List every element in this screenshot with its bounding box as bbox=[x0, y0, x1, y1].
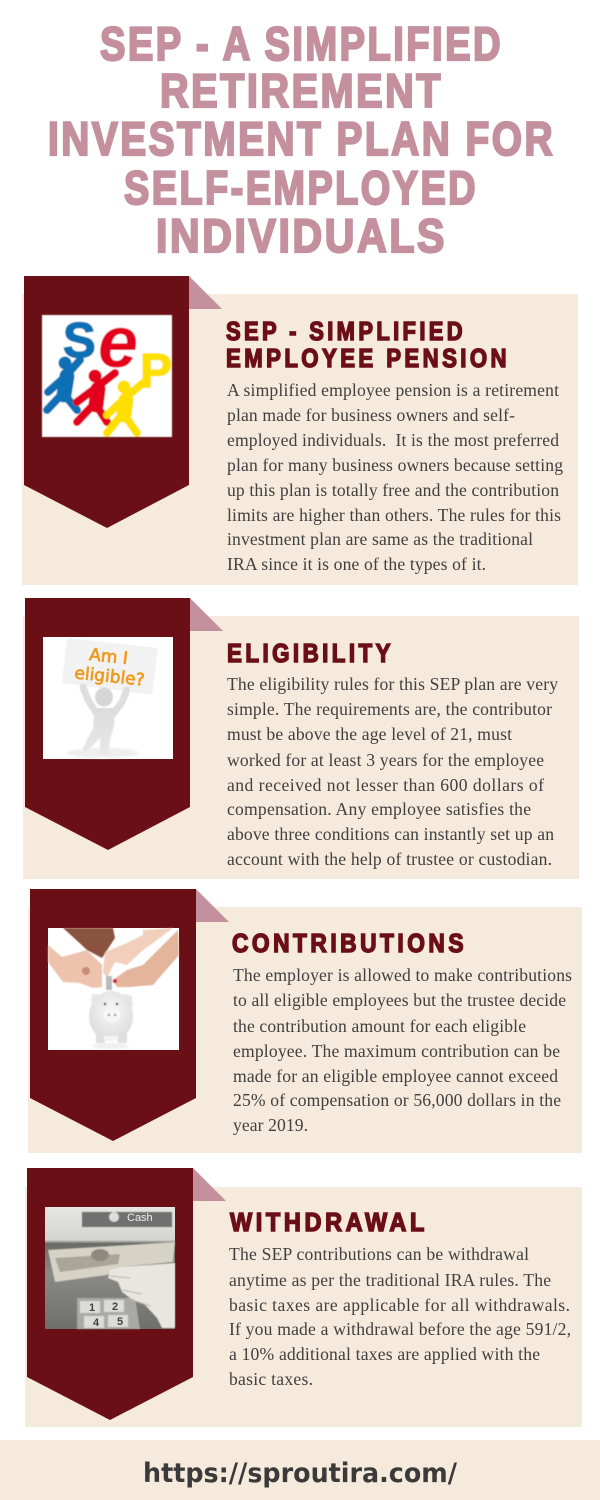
ribbon fold bbox=[193, 1168, 226, 1201]
icon: hands over piggy bank bbox=[48, 928, 179, 1050]
body text bbox=[229, 1244, 571, 1389]
panel: contributions bbox=[28, 889, 582, 1153]
ribbon fold bbox=[189, 276, 222, 309]
body text: worked for at least 3 years for the employee bbox=[227, 750, 544, 770]
keypad digit 2: 2 bbox=[112, 1301, 118, 1313]
keypad digit 1: 1 bbox=[89, 1302, 95, 1314]
body text: up this plan is totally free and the contribution bbox=[227, 480, 559, 500]
icon: am I eligible figure bbox=[43, 637, 173, 759]
icon: SEP logo: P bbox=[140, 345, 172, 398]
title: RETIREMENT bbox=[160, 64, 443, 117]
icon: ATM cash withdrawal: Cash bbox=[127, 1212, 153, 1224]
body text: basic taxes are applicable for all withdrawals. bbox=[229, 1295, 570, 1315]
body text: plan made for business owners and self- bbox=[227, 405, 515, 425]
panel: withdrawal bbox=[25, 1168, 582, 1427]
heading: EMPLOYEE PENSION bbox=[226, 343, 510, 373]
title: SELF-EMPLOYED bbox=[124, 161, 478, 214]
icon: am I eligible figure: eligible? bbox=[73, 663, 146, 691]
keypad digit 5: 5 bbox=[117, 1316, 123, 1328]
body text: to all eligible employees but the trustee decide bbox=[233, 990, 566, 1010]
body text: account with the help of trustee or custodian. bbox=[227, 849, 552, 869]
ribbon bbox=[30, 889, 196, 1141]
title: INDIVIDUALS bbox=[156, 209, 447, 262]
panel background bbox=[22, 294, 578, 585]
body text: plan for many business owners because setting bbox=[227, 455, 563, 475]
body text bbox=[227, 674, 558, 869]
body text: above three conditions can instantly set up an bbox=[227, 824, 554, 844]
body text bbox=[233, 965, 572, 1135]
panel: SEP definition bbox=[22, 276, 578, 585]
body text: basic taxes. bbox=[229, 1369, 313, 1389]
body text: compensation. Any employee satisfies the bbox=[227, 799, 531, 819]
ribbon fold bbox=[190, 598, 223, 631]
body text: The employer is allowed to make contributions bbox=[233, 965, 572, 985]
body text: employed individuals. It is the most preferred bbox=[227, 430, 559, 450]
title: SEP - A SIMPLIFIED bbox=[100, 17, 503, 70]
keypad digit 4: 4 bbox=[93, 1317, 100, 1329]
icon: SEP logo: S bbox=[63, 314, 96, 368]
panel background bbox=[23, 616, 579, 879]
panel background bbox=[28, 907, 582, 1153]
icon: am I eligible figure: Am I bbox=[88, 645, 129, 669]
body text: The SEP contributions can be withdrawal bbox=[229, 1244, 529, 1264]
ribbon fold bbox=[196, 889, 229, 922]
body text: a 10% additional taxes are applied with the bbox=[229, 1344, 540, 1364]
footer url: https://sproutira.com/ bbox=[143, 1458, 457, 1489]
heading bbox=[226, 316, 510, 373]
icon: SEP logo: e bbox=[98, 303, 138, 383]
body text: and received not lesser than 600 dollars of bbox=[227, 775, 544, 795]
ribbon bbox=[24, 276, 189, 528]
body text: 25% of compensation or 56,000 dollars in the bbox=[233, 1090, 561, 1110]
icon: SEP logo bbox=[42, 303, 172, 437]
heading: SEP - SIMPLIFIED bbox=[226, 316, 466, 346]
heading: CONTRIBUTIONS bbox=[232, 928, 467, 958]
body text: the contribution amount for each eligible bbox=[233, 1016, 526, 1036]
body text: If you made a withdrawal before the age 591/2, bbox=[229, 1319, 571, 1339]
ribbon bbox=[25, 598, 190, 850]
footer bbox=[0, 1440, 600, 1500]
body text bbox=[227, 380, 563, 574]
heading: ELIGIBILITY bbox=[227, 638, 394, 668]
body text: investment plan are same as the traditional bbox=[227, 529, 533, 549]
footer band bbox=[0, 1440, 600, 1500]
body text: A simplified employee pension is a retirement bbox=[227, 380, 559, 400]
ribbon bbox=[27, 1168, 193, 1420]
title bbox=[48, 17, 555, 262]
body text: employee. The maximum contribution can be bbox=[233, 1041, 560, 1061]
body text: must be above the age level of 21, must bbox=[227, 724, 512, 744]
body text: made for an eligible employee cannot exceed bbox=[233, 1066, 558, 1086]
icon: ATM cash withdrawal bbox=[45, 1207, 175, 1329]
body text: limits are higher than others. The rules for this bbox=[227, 505, 561, 525]
panel background bbox=[25, 1187, 582, 1427]
body text: simple. The requirements are, the contributor bbox=[227, 699, 552, 719]
body text: The eligibility rules for this SEP plan are very bbox=[227, 674, 558, 694]
body text: year 2019. bbox=[233, 1115, 308, 1135]
body text: anytime as per the traditional IRA rules. The bbox=[229, 1270, 551, 1290]
body text: IRA since it is one of the types of it. bbox=[227, 554, 486, 574]
panel: eligibility bbox=[23, 598, 579, 879]
heading: WITHDRAWAL bbox=[230, 1207, 428, 1237]
